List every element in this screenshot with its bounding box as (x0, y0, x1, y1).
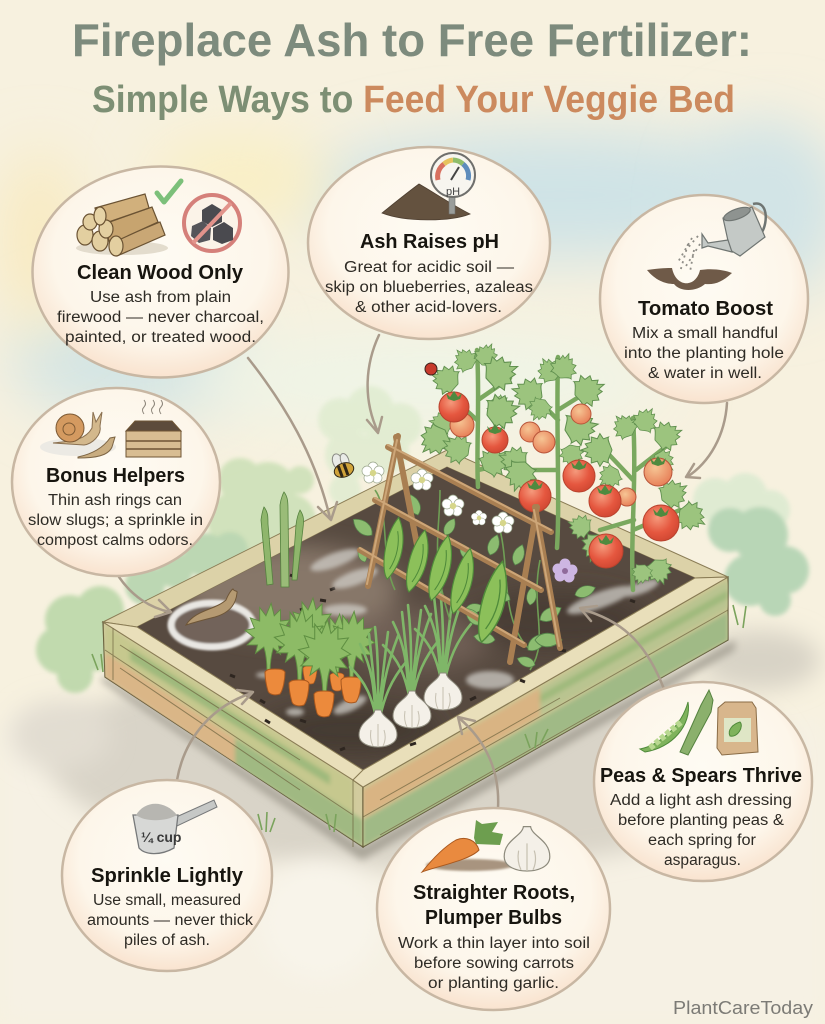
body text: Work a thin layer into soil (398, 935, 590, 952)
title (72, 14, 752, 121)
right plank colour (363, 580, 728, 847)
body text (57, 289, 264, 346)
right side planks (363, 577, 728, 847)
title line 2: Simple Ways to Feed Your Veggie Bed (92, 79, 735, 121)
slug in ash ring (171, 589, 253, 647)
body text: painted, or treated wood. (65, 329, 256, 346)
body text: into the planting hole (624, 345, 784, 362)
panel: sprinkle lightly (62, 780, 272, 971)
body text: & water in well. (648, 365, 762, 382)
soil specks (180, 575, 635, 750)
panel: straighter roots, plumper bulbs (377, 808, 610, 1010)
body text: Add a light ash dressing (610, 792, 792, 809)
plank lines (105, 610, 728, 847)
body text: compost calms odors. (37, 532, 193, 549)
arrow: bonus helpers to slug (119, 577, 171, 617)
panel: peas and spears thrive (594, 682, 812, 881)
soil (137, 467, 695, 770)
wooden frame highlights (360, 440, 559, 646)
wooden frame (360, 436, 560, 662)
body text: amounts — never thick (87, 912, 253, 929)
arrow: straighter roots to garlic (458, 717, 498, 808)
stems (455, 350, 680, 590)
icon: quarter cup measure: ¼ cup (141, 829, 181, 845)
icon: pH gauge (431, 153, 475, 214)
heading: Sprinkle Lightly (91, 865, 244, 887)
left rim (103, 622, 363, 780)
arrow: tomato boost to tomatoes (686, 403, 727, 478)
icon: no charcoal (184, 195, 240, 251)
body text: each spring for (648, 832, 756, 849)
arrows (119, 335, 727, 808)
icon: ash sprinkles (678, 236, 700, 272)
arrow: peas and spears to trellis (580, 606, 664, 689)
panel: clean wood only (32, 166, 288, 378)
icon: soil pile (382, 184, 470, 220)
panel: ash raises pH (308, 147, 550, 339)
body text (325, 259, 533, 316)
body text: & other acid-lovers. (355, 299, 502, 316)
background bushes (36, 386, 809, 693)
body text: firewood — never charcoal, (57, 309, 264, 326)
body text (28, 492, 203, 549)
title line 1: Fireplace Ash to Free Fertilizer: (72, 14, 752, 66)
body text (624, 325, 784, 382)
asparagus spears (261, 492, 304, 587)
icon: garlic bulb (504, 827, 550, 871)
pea pods (381, 517, 506, 642)
grass tufts (92, 605, 746, 832)
watermark: PlantCareToday (673, 998, 813, 1018)
panel: bonus helpers (12, 388, 220, 576)
body text: before sowing carrots (414, 955, 574, 972)
arrow: ash raises pH to bed (367, 335, 382, 433)
left side planks (103, 622, 363, 847)
icon: planting hole (647, 268, 732, 290)
left plank colour (105, 625, 363, 847)
panel: tomato boost (600, 195, 808, 403)
icon: compost box (126, 400, 181, 457)
body text: Mix a small handful (632, 325, 778, 342)
arrow: clean wood to bed (248, 358, 337, 520)
icon: carrot (422, 820, 503, 872)
slug (186, 589, 237, 625)
icon: seed packet (717, 702, 758, 755)
icon: pea pod (640, 702, 689, 752)
body text: before planting peas & (618, 812, 785, 829)
body text (87, 892, 253, 949)
tomato calyxes (446, 391, 669, 545)
garlic plants (350, 589, 471, 747)
heading: Ash Raises pH (360, 231, 499, 253)
raised garden bed (92, 450, 746, 860)
body text: Great for acidic soil — (344, 259, 515, 276)
pea vines and leaves (349, 490, 597, 670)
pea trellis (328, 436, 597, 670)
body text (398, 935, 590, 992)
body text (610, 792, 792, 869)
body text: skip on blueberries, azaleas (325, 279, 533, 296)
body text: piles of ash. (124, 932, 210, 949)
right rim (353, 577, 728, 787)
body text: slow slugs; a sprinkle in (28, 512, 203, 529)
ash patches (256, 545, 661, 718)
heading: Tomato Boost (638, 298, 773, 320)
heading: Straighter Roots, (413, 882, 575, 904)
heading: Plumper Bulbs (425, 907, 562, 929)
heading (413, 882, 575, 929)
icon: log pile (76, 194, 168, 256)
body text: Use ash from plain (90, 289, 231, 306)
body text: Thin ash rings can (48, 492, 182, 509)
icon: snail (40, 412, 116, 458)
heading: Peas & Spears Thrive (600, 765, 802, 787)
icon: green check (157, 181, 181, 202)
bed shadow (100, 640, 735, 860)
tomatoes (439, 392, 679, 568)
carrots (245, 598, 375, 717)
body text: Use small, measured (93, 892, 241, 909)
ash ring (171, 603, 253, 647)
leaves (411, 339, 712, 589)
icon: watering can (702, 204, 766, 256)
icon: soil under vegetables (426, 859, 514, 871)
heading: Clean Wood Only (77, 262, 244, 284)
bee (328, 450, 356, 480)
soil tone (180, 545, 650, 755)
body text: asparagus. (664, 852, 741, 869)
body text: or planting garlic. (428, 975, 559, 992)
icon: pH gauge: pH (446, 186, 460, 198)
tomato plants (411, 339, 712, 590)
arrow: sprinkle lightly to bed (177, 690, 253, 780)
heading: Bonus Helpers (46, 465, 185, 487)
flowers (362, 462, 578, 582)
icon: quarter cup measure (133, 800, 217, 854)
ladybug (425, 363, 437, 375)
back rim (103, 450, 728, 627)
icon: asparagus (680, 690, 713, 755)
